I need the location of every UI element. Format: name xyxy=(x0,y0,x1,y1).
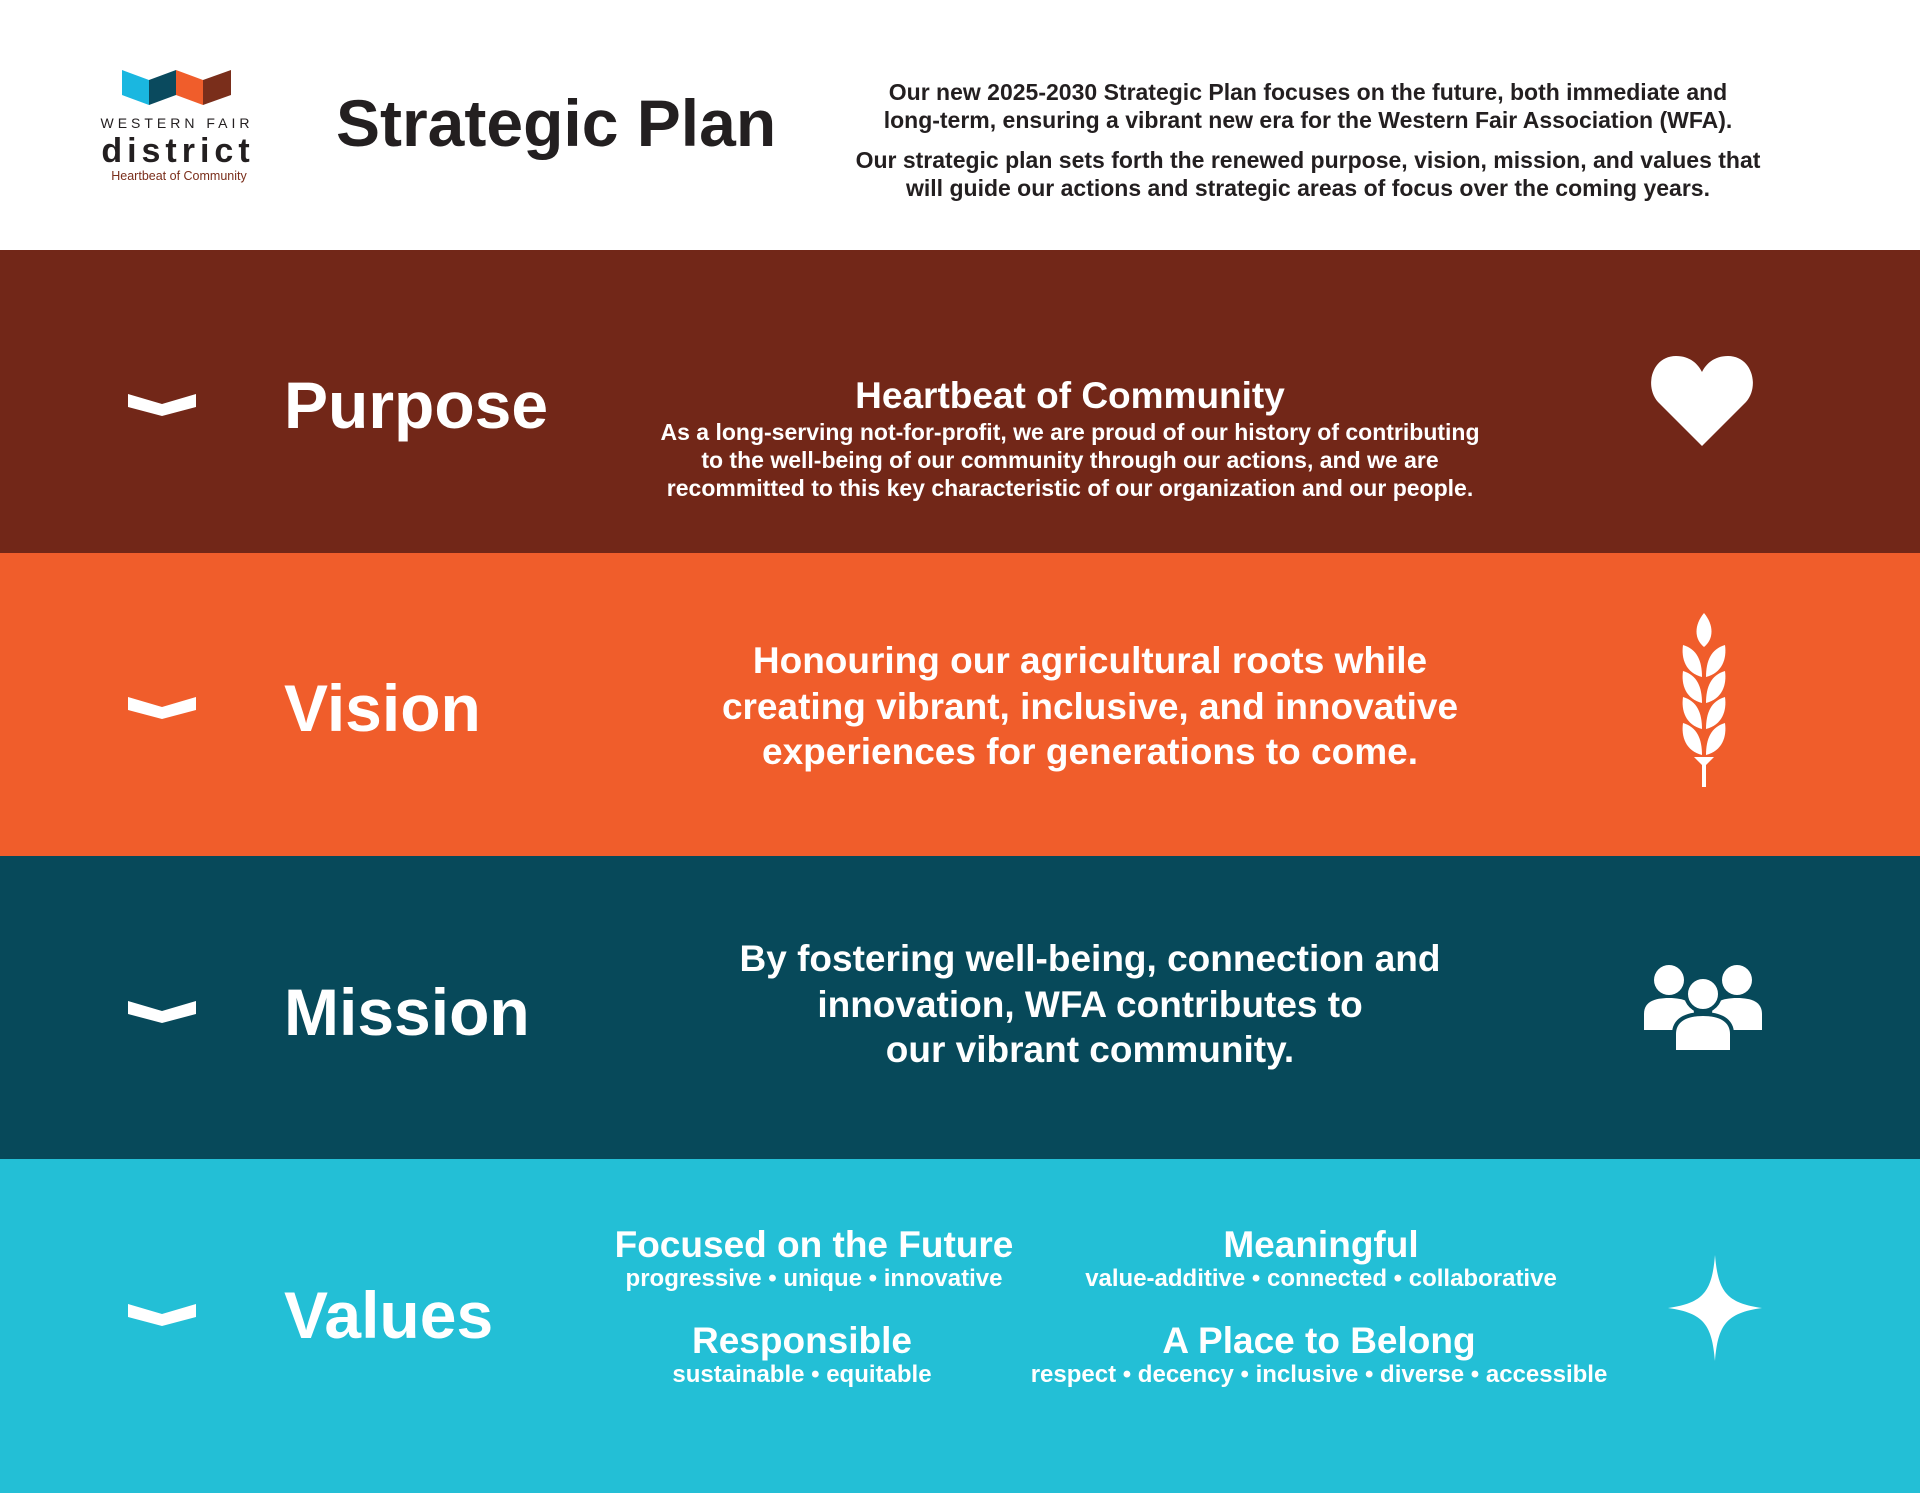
intro text xyxy=(856,79,1760,201)
value: a place to belong: A Place to Belong xyxy=(1162,1320,1476,1361)
intro text: Our strategic plan sets forth the renewed purpose, vision, mission, and values that xyxy=(856,147,1760,173)
value: focused on the future: Focused on the Future xyxy=(615,1224,1013,1265)
vision text: experiences for generations to come. xyxy=(762,731,1418,772)
value: a place to belong: respect • decency • inclusive • diverse • accessible xyxy=(1031,1361,1607,1388)
heading: Mission: Mission xyxy=(284,975,530,1049)
heading: Vision: Vision xyxy=(284,671,481,745)
value: focused on the future: progressive • unique • innovative xyxy=(626,1265,1002,1292)
title: Strategic Plan xyxy=(336,86,776,160)
panel: values xyxy=(0,1159,1920,1493)
purpose text: As a long-serving not-for-profit, we are proud of our history of contributing xyxy=(660,419,1480,445)
value: responsible: sustainable • equitable xyxy=(672,1361,932,1388)
vision text: creating vibrant, inclusive, and innovative xyxy=(722,686,1458,726)
icon: people xyxy=(1644,965,1762,1050)
icon: sparkle xyxy=(1668,1255,1762,1361)
value: a place to belong xyxy=(1031,1320,1607,1388)
chevron xyxy=(128,394,196,416)
value: responsible xyxy=(672,1320,932,1388)
panel: vision xyxy=(0,553,1920,856)
value: meaningful xyxy=(1085,1224,1557,1292)
heading: Purpose: Purpose xyxy=(284,368,548,442)
logo: Heartbeat of Community xyxy=(111,169,247,183)
purpose text: recommitted to this key characteristic of our organization and our people. xyxy=(667,475,1473,501)
mission text: our vibrant community. xyxy=(886,1029,1294,1070)
header xyxy=(100,70,1760,201)
mission text: innovation, WFA contributes to xyxy=(817,984,1363,1024)
mission text: By fostering well-being, connection and xyxy=(740,938,1440,979)
chevron xyxy=(128,1304,196,1326)
chevron xyxy=(128,697,196,719)
logo: WESTERN FAIR xyxy=(100,115,254,131)
vision text xyxy=(722,640,1458,772)
purpose text: Heartbeat of Community xyxy=(855,375,1285,416)
icon: heart xyxy=(1651,356,1753,446)
intro text: will guide our actions and strategic areas of focus over the coming years. xyxy=(906,175,1710,201)
logo: district xyxy=(101,132,255,170)
intro text: long-term, ensuring a vibrant new era for the Western Fair Association (WFA). xyxy=(884,107,1732,133)
purpose text: to the well-being of our community through our actions, and we are xyxy=(701,447,1439,473)
chevron xyxy=(128,1001,196,1023)
value: meaningful: value-additive • connected • collaborative xyxy=(1085,1265,1557,1292)
value: responsible: Responsible xyxy=(692,1320,912,1361)
mission text xyxy=(740,938,1440,1070)
value: meaningful: Meaningful xyxy=(1223,1224,1419,1265)
vision text: Honouring our agricultural roots while xyxy=(753,640,1427,681)
panel: purpose xyxy=(0,250,1920,553)
value: focused on the future xyxy=(615,1224,1013,1292)
logo xyxy=(100,70,255,183)
icon: wheat xyxy=(1682,613,1726,787)
intro text: Our new 2025-2030 Strategic Plan focuses on the future, both immediate and xyxy=(889,79,1727,105)
panel: mission xyxy=(0,856,1920,1159)
purpose text xyxy=(660,375,1480,501)
heading: Values: Values xyxy=(284,1278,493,1352)
